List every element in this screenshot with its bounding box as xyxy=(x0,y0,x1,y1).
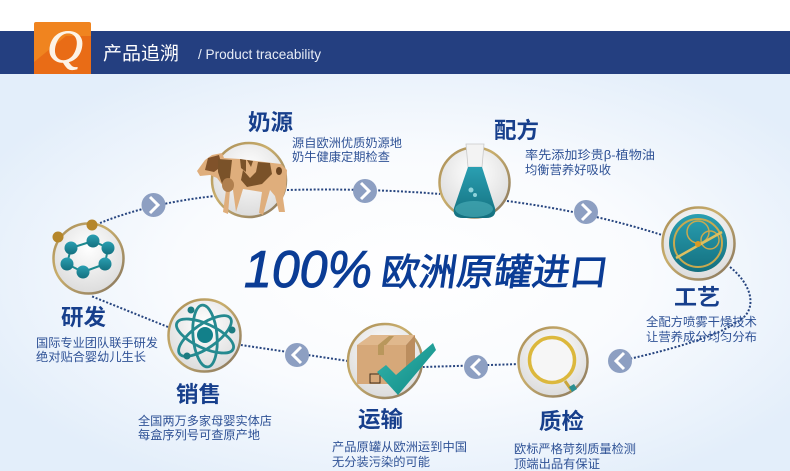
heading: 产品追溯: 产品追溯 xyxy=(103,43,179,64)
description: 奶源 xyxy=(292,136,402,164)
icon: magnifier xyxy=(518,328,588,396)
icon: Q logo: Q xyxy=(47,21,83,73)
description: 工艺 xyxy=(646,314,757,344)
description: 配方 xyxy=(525,147,655,177)
description: 配方: 均衡营养好吸收 xyxy=(525,162,611,177)
title: 工艺: 工艺 xyxy=(674,285,720,310)
arrow: 工艺 to 质检 xyxy=(608,349,632,373)
icon: gear dial xyxy=(662,208,734,280)
icon: molecule xyxy=(52,220,124,294)
title: 销售: 销售 xyxy=(176,382,221,407)
headline: 100% 欧洲原罐进口: 欧洲原罐进口 xyxy=(379,251,611,293)
step: 运输 xyxy=(332,324,467,469)
description: 销售: 每盒序列号可查原产地 xyxy=(138,427,260,442)
arrow: 奶源 to 配方 xyxy=(353,179,377,203)
description: 研发: 绝对贴合婴幼儿生长 xyxy=(36,349,146,364)
description: 工艺: 全配方喷雾干燥技术 xyxy=(646,314,757,329)
icon: atom xyxy=(168,300,240,372)
description: 运输: 产品原罐从欧洲运到中国 xyxy=(332,439,467,454)
description: 奶源: 奶牛健康定期检查 xyxy=(292,149,390,164)
description: 研发: 国际专业团队联手研发 xyxy=(36,335,158,350)
headline: 100% 欧洲原罐进口 xyxy=(244,241,611,299)
description: 研发 xyxy=(36,335,158,364)
icon: flask xyxy=(440,144,510,218)
icon: box with check xyxy=(348,324,436,398)
title: 配方: 配方 xyxy=(494,118,539,143)
description: 奶源: 源自欧洲优质奶源地 xyxy=(292,136,402,150)
step: 研发 xyxy=(36,220,158,364)
title: 奶源: 奶源 xyxy=(248,110,293,135)
headline: 100% 欧洲原罐进口: 100% xyxy=(244,241,372,299)
title: 质检: 质检 xyxy=(539,409,584,434)
arrow: 运输 to 销售 xyxy=(285,343,309,367)
icon: Q logo xyxy=(34,21,91,74)
step: 销售 xyxy=(138,300,272,442)
description: 工艺: 让营养成分均匀分布 xyxy=(646,329,757,344)
arrow: 研发 to 奶源 xyxy=(142,193,166,217)
description: 运输: 无分装污染的可能 xyxy=(332,454,430,469)
description: 运输 xyxy=(332,439,467,469)
description: 质检: 顶端出品有保证 xyxy=(514,457,600,471)
step: 工艺 xyxy=(646,208,757,344)
header banner xyxy=(0,21,790,74)
title: 研发: 研发 xyxy=(61,305,106,330)
step: 奶源 xyxy=(197,110,402,217)
description: 质检 xyxy=(514,441,636,471)
step: 质检 xyxy=(514,328,636,471)
description: 销售 xyxy=(138,413,272,442)
description: 销售: 全国两万多家母婴实体店 xyxy=(138,413,272,428)
arrow: 质检 to 运输 xyxy=(464,355,488,379)
step: 配方 xyxy=(440,118,655,218)
dotted flow path xyxy=(91,190,750,367)
heading: Product traceability: / Product traceability xyxy=(198,46,321,62)
description: 质检: 欧标严格苛刻质量检测 xyxy=(514,441,636,456)
arrow: 配方 to 工艺 xyxy=(574,200,598,224)
description: 配方: 率先添加珍贵β-植物油 xyxy=(525,147,655,162)
icon: cow xyxy=(197,143,287,217)
title: 运输: 运输 xyxy=(358,407,403,432)
